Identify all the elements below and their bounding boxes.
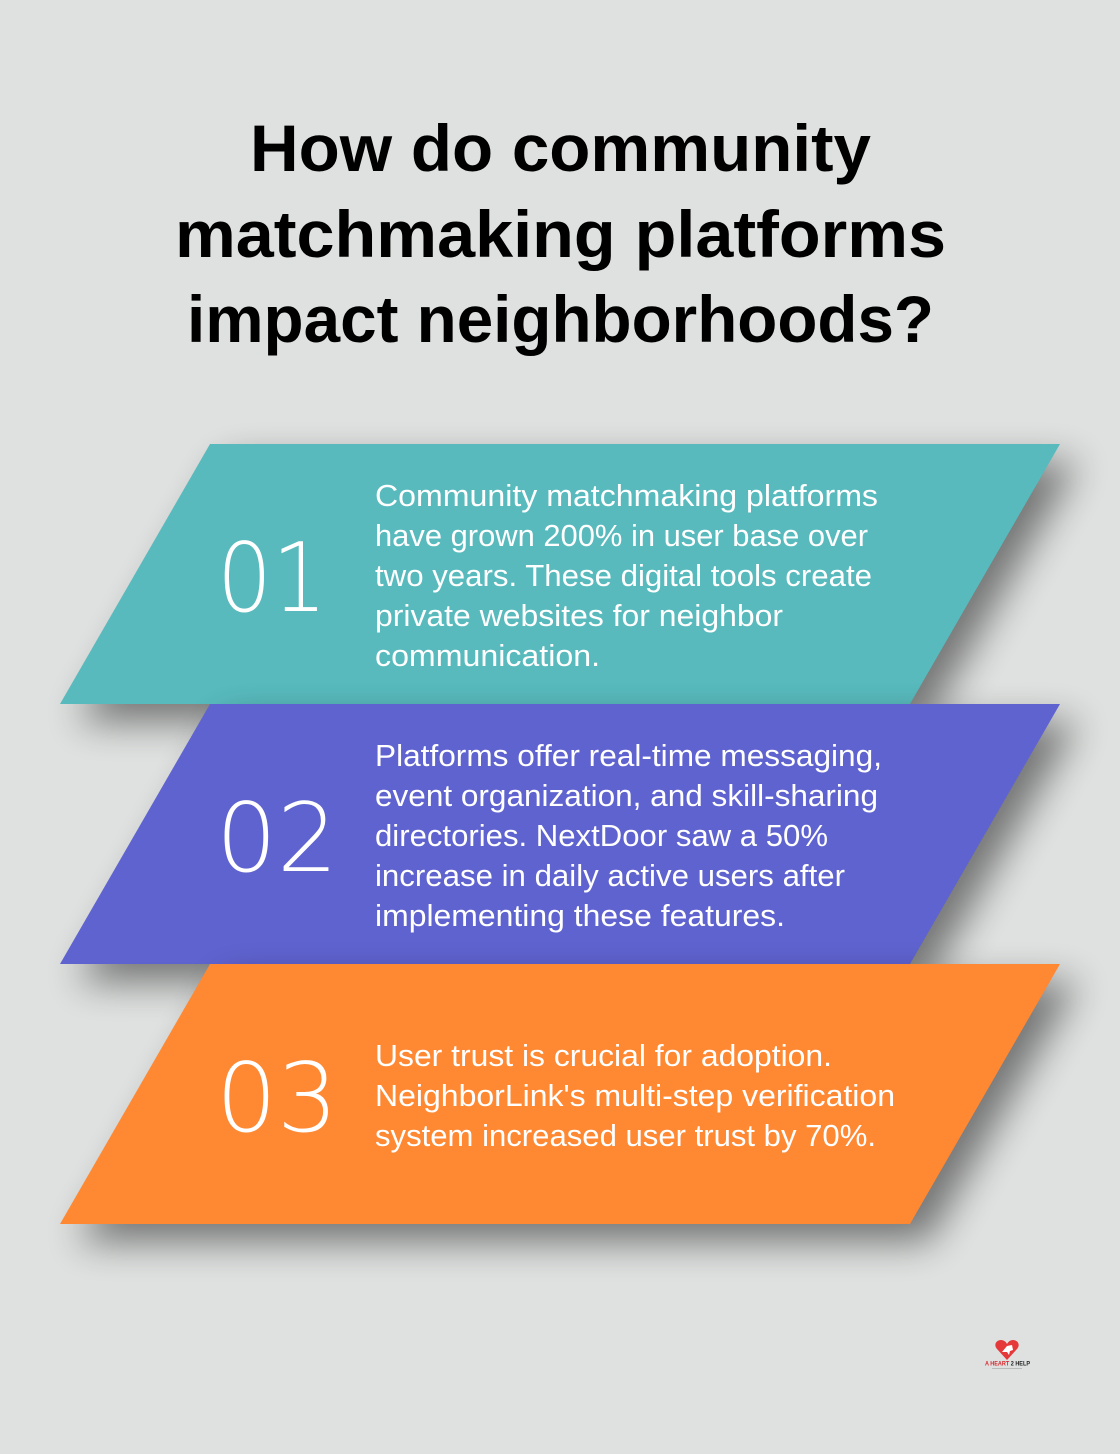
title: impact neighborhoods?: [187, 282, 934, 356]
text block: step 03 description: system increased user trust by 70%.: [375, 1118, 876, 1153]
panel shape: purple parallelogram: [60, 704, 1060, 964]
logo: A Heart 2 Help: [985, 1340, 1030, 1369]
title: matchmaking platforms: [175, 197, 946, 271]
text block: step 02 description: directories. NextDoor saw a 50%: [375, 818, 828, 853]
text block: step 01 description: two years. These digital tools create: [375, 558, 872, 593]
panel shape: teal parallelogram: [60, 444, 1060, 704]
text block: step 01 description: Community matchmaking platforms: [375, 478, 878, 513]
panel: step 01: [60, 444, 1078, 722]
title: How do community: [250, 111, 871, 185]
text block: step 02 description: Platforms offer real-time messaging,: [375, 738, 882, 773]
number 01: 01: [217, 524, 327, 634]
text block: step 02 description: event organization, and skill-sharing: [375, 778, 878, 813]
text block: step 02 description: implementing these features.: [375, 898, 785, 933]
text block: step 02 description: increase in daily active users after: [375, 858, 845, 893]
text block: step 03 description: NeighborLink's multi-step verification: [375, 1078, 895, 1113]
text block: step 03 description: [375, 1038, 895, 1153]
text block: step 01 description: have grown 200% in user base over: [375, 518, 868, 553]
text block: step 01 description: communication.: [375, 638, 600, 673]
icon: heart with hands: [995, 1340, 1019, 1360]
logo wordmark: A HEART 2 HELP: [985, 1362, 1030, 1368]
text block: step 01 description: [375, 478, 878, 673]
panel shape: orange parallelogram: [60, 964, 1060, 1224]
title: [175, 111, 946, 356]
number 03: 03: [216, 1044, 338, 1154]
text block: step 01 description: private websites for neighbor: [375, 598, 783, 633]
logo tagline: [992, 1368, 1022, 1369]
panel: step 02: [60, 704, 1078, 982]
text block: step 02 description: [375, 738, 882, 933]
number 02: 02: [216, 784, 338, 894]
text block: step 03 description: User trust is crucial for adoption.: [375, 1038, 832, 1073]
panel: step 03: [60, 964, 1078, 1242]
